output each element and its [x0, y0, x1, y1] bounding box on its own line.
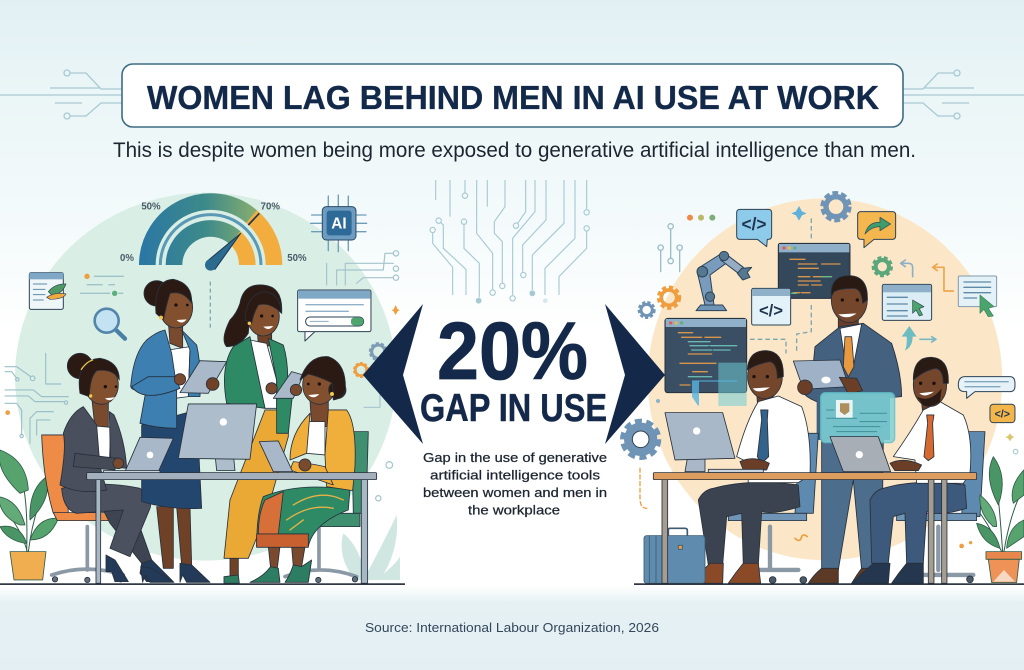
- chair: [42, 435, 123, 583]
- icon: sparkle: [791, 206, 807, 221]
- left illustration: women at work: [0, 193, 405, 585]
- seated man left: [690, 351, 810, 583]
- standing woman green jacket: [224, 285, 303, 583]
- dots: [687, 215, 715, 221]
- description text: between women and men in: [423, 485, 607, 500]
- subtitle: This is despite women being more exposed to generative artificial intelligence than men.: [113, 138, 916, 162]
- description text: artificial intelligence tools: [430, 468, 600, 482]
- desk devices men: [665, 413, 891, 473]
- pale leaf plant: [342, 515, 400, 580]
- gauge labels: 70%: [261, 201, 280, 212]
- arrow right: [605, 304, 665, 444]
- icon: code window left: [665, 318, 747, 406]
- standing woman blue jacket: [131, 279, 227, 582]
- icon: small gears: [354, 344, 386, 377]
- circuit left of figures: [5, 353, 68, 443]
- gauge labels: 50%: [287, 253, 307, 264]
- stat label: gap in use: GAP IN USE: [420, 387, 607, 430]
- description text: Gap in the use of generative: [423, 450, 607, 465]
- desk devices: [103, 404, 293, 473]
- orange dashed connector: [640, 468, 647, 508]
- plant right: [977, 457, 1024, 583]
- monitor: [178, 404, 257, 471]
- description text: [423, 450, 607, 518]
- seated man right: [852, 357, 971, 583]
- hologram panel: [821, 393, 895, 443]
- gauge labels: [120, 201, 307, 264]
- stat: 20%: 20%: [437, 306, 588, 397]
- header circuit right: [903, 70, 1024, 119]
- seated woman left: [42, 353, 173, 583]
- sparkle: [391, 305, 400, 315]
- header circuit left: [0, 70, 122, 119]
- title: WOMEN LAG BEHIND MEN IN AI USE AT WORK: [147, 80, 879, 117]
- icon: gear top: [823, 194, 849, 219]
- icon: arrow bubble: [858, 212, 896, 248]
- laptop: [103, 437, 173, 473]
- arrows small: [901, 260, 953, 342]
- icon: search window: [298, 290, 371, 341]
- icon: robot arm: [696, 251, 752, 311]
- ground line left: [0, 583, 405, 585]
- icon: code tag: </>: [995, 408, 1010, 420]
- icon: browser with leaf: [29, 273, 66, 309]
- chairs men: [728, 432, 985, 583]
- icon: gear green: [874, 258, 891, 275]
- small accents: [656, 399, 1018, 548]
- dots and dashes: [80, 274, 210, 330]
- plant left: [0, 450, 58, 580]
- dashed connector: [750, 218, 811, 353]
- tablet: [259, 441, 293, 472]
- icon: code tag window: </>: [759, 301, 783, 320]
- icon: code window large top: [778, 243, 850, 298]
- icon: AI chip: [311, 195, 367, 252]
- icon: gears left: [639, 288, 679, 317]
- gauge labels: 50%: [141, 201, 161, 212]
- icon: code bubble: </>: [741, 214, 767, 234]
- icon: AI chip: AI: [331, 216, 347, 233]
- icon: large gear: [623, 422, 658, 457]
- green circle backdrop: [15, 193, 396, 561]
- icon: document and cursor: [958, 276, 997, 317]
- centre circuit lines: [430, 180, 589, 303]
- description text: the workplace: [468, 502, 560, 518]
- gauge labels: 0%: [120, 253, 134, 264]
- ground line right: [634, 583, 1024, 585]
- arrow left: [363, 304, 423, 444]
- title box: [122, 64, 903, 127]
- laptop: [830, 437, 891, 472]
- right illustration: men at work: [623, 194, 1024, 585]
- icon: cursor window: [882, 284, 932, 320]
- icon: magnifier: [95, 309, 125, 339]
- desk: [653, 473, 977, 583]
- icon: code tag: [990, 404, 1015, 423]
- icon: code bubble: [737, 209, 772, 247]
- gauge: [147, 202, 274, 271]
- source: Source: International Labour Organization, 2026: [365, 620, 659, 635]
- circuit right of figures: [327, 251, 399, 501]
- standing man: [793, 276, 902, 583]
- icon: teal up arrow: [902, 326, 917, 351]
- seated woman yellow jacket: [250, 357, 368, 583]
- icon: code tag window: [752, 288, 791, 325]
- desk: [87, 473, 377, 583]
- circuit pins: [658, 224, 682, 272]
- chair: [285, 432, 368, 583]
- peach circle backdrop: [648, 198, 1002, 560]
- monitor: [665, 413, 763, 473]
- icon: message bubble: [958, 377, 1015, 398]
- briefcase: [644, 528, 705, 583]
